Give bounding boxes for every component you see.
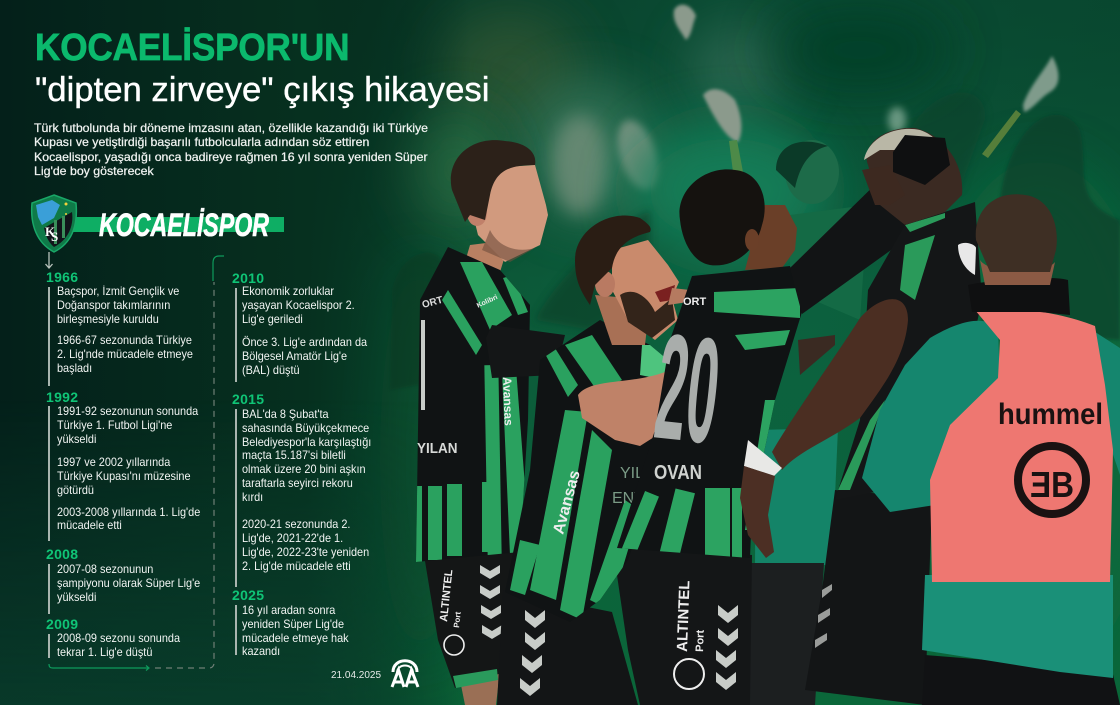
timeline left column [46, 269, 200, 659]
intro paragraph: Lig'de boy gösterecek [34, 164, 154, 178]
2010 text: yaşayan Kocaelispor 2. [242, 299, 355, 312]
2009 text: tekrar 1. Lig'e düştü [57, 646, 152, 659]
arrow: crest to 1966 [45, 252, 53, 269]
1966 text: başladı [57, 362, 92, 375]
1992 text [57, 405, 200, 532]
2010 text: Lig'e geriledi [242, 312, 303, 326]
player 2: ENT [612, 490, 644, 507]
1966: 1966 [46, 269, 78, 285]
player 3 legs: ALTINTEL [674, 580, 693, 652]
player 1: Kolibri [476, 294, 499, 310]
2010 text: Önce 3. Lig'e ardından da [242, 336, 367, 349]
title line 1: KOCAELİSPOR'UN [35, 27, 349, 69]
player 3 legs: Port [694, 629, 707, 652]
date: 21.04.2025 [331, 670, 381, 681]
icon: club crest [32, 195, 76, 252]
1992 text: Türkiye Kupası'nı müzesine [57, 470, 191, 483]
title [35, 27, 489, 109]
2008 text [57, 563, 200, 604]
1992 text: 1991-92 sezonunun sonunda [57, 405, 198, 418]
player 1 [416, 140, 565, 705]
intro paragraph [34, 121, 428, 178]
2025: 2025 [232, 587, 264, 603]
1992 text: mücadele etti [57, 519, 122, 532]
2015 text: 2020-21 sezonunda 2. [242, 518, 350, 531]
player 2: YILD [620, 465, 656, 482]
player 1: YILAN [417, 440, 457, 457]
shirt number: 20 [649, 302, 727, 475]
2025 text: mücadele etmeye hak [242, 632, 349, 644]
1992 text: götürdü [57, 484, 94, 497]
1966 text: 2. Lig'nde mücadele etmeye [57, 348, 193, 361]
1966 text: Baçspor, İzmit Gençlik ve [57, 285, 179, 298]
smoke [380, 5, 1120, 680]
player 3 [617, 169, 922, 560]
2008: 2008 [46, 546, 78, 562]
1992 text: 2003-2008 yıllarında 1. Lig'de [57, 506, 200, 518]
player 1: Port [452, 611, 463, 628]
1966 text [57, 285, 193, 375]
2008 text: yükseldi [57, 590, 96, 604]
1966 text: 1966-67 sezonunda Türkiye [57, 334, 192, 347]
2009: 2009 [46, 616, 78, 632]
2008 text: 2007-08 sezonunun [57, 563, 153, 576]
player 2 [497, 216, 690, 705]
staff member in pink bib [862, 194, 1120, 705]
left dark fade [0, 0, 470, 705]
2010: 2010 [232, 270, 264, 286]
crowd silhouettes [390, 92, 1120, 390]
1992 text: yükseldi [57, 432, 96, 446]
player 4 [740, 128, 982, 705]
intro paragraph: Türk futbolunda bir döneme imzasını atan, özellikle kazandığı iki Türkiye [34, 121, 428, 135]
2008 text: şampiyonu olarak Süper Lig'e [57, 577, 200, 590]
player 1: ALTINTEL [438, 569, 455, 622]
brand band [30, 194, 284, 253]
2015 text: BAL'da 8 Şubat'ta [242, 408, 329, 421]
2015 text: olmak üzere 20 bini aşkın [242, 463, 366, 476]
timeline right column [232, 270, 371, 658]
title line 2: "dipten zirveye" çıkış hikayesi [35, 71, 489, 109]
1992 text: 1997 ve 2002 yıllarında [57, 456, 170, 469]
2025 text: kazandı [242, 645, 280, 658]
player 3 legs [613, 548, 752, 705]
icon: club crest: S [51, 229, 58, 244]
1966 text: birleşmesiyle kuruldu [57, 312, 159, 326]
staff member in pink bib: ƎB [1030, 464, 1074, 505]
2015 text: kırdı [242, 490, 263, 504]
staff member in pink bib: hummel [998, 398, 1103, 431]
2015 text: 2. Lig'de mücadele etti [242, 560, 351, 572]
icon: club crest: K [45, 224, 56, 239]
intro paragraph: Kocaelispor, yaşadığı onca badireye rağmen 16 yıl sonra yeniden Süper [34, 150, 428, 164]
player 3: ORT [683, 296, 706, 308]
intro paragraph: Kupası ve yetiştirdiği başarılı futbolcularla adından söz ettiren [34, 135, 369, 149]
player 3: OVAN [654, 462, 702, 484]
2015 text: sahasında Büyükçekmece [242, 422, 369, 435]
1966 text: Doğanspor takımlarının [57, 299, 170, 312]
2009 text [57, 632, 180, 659]
2015 text: Lig'de, 2021-22'de 1. [242, 532, 343, 545]
2015 text: Belediyespor'la karşılaştığı [242, 436, 371, 448]
icon: AA agency logo [390, 659, 420, 688]
1992: 1992 [46, 389, 78, 405]
2015 text: maçta 15.187'si biletli [242, 449, 346, 462]
2010 text [242, 285, 368, 377]
2025 text [242, 604, 349, 658]
player 1: Avansas [500, 377, 516, 426]
2010 text: Bölgesel Amatör Lig'e [242, 350, 347, 363]
player 1: ORT [421, 295, 444, 311]
2009 text: 2008-09 sezonu sonunda [57, 632, 180, 645]
2015 text [242, 408, 371, 572]
teal-shirted figure behind [744, 428, 838, 705]
2025 text: yeniden Süper Lig'de [242, 618, 344, 631]
arrow: connector between timeline columns [48, 255, 224, 671]
2015 text: Lig'de, 2022-23'te yeniden [242, 546, 369, 559]
player 2: Avansas [550, 469, 584, 536]
2010 text: (BAL) düştü [242, 364, 300, 377]
green bar [72, 217, 284, 232]
2015 text: taraftarla seyirci rekoru [242, 477, 353, 490]
2010 text: Ekonomik zorluklar [242, 285, 334, 298]
1992 text: Türkiye 1. Futbol Ligi'ne [57, 419, 172, 432]
2025 text: 16 yıl aradan sonra [242, 604, 335, 617]
2015: 2015 [232, 391, 264, 407]
